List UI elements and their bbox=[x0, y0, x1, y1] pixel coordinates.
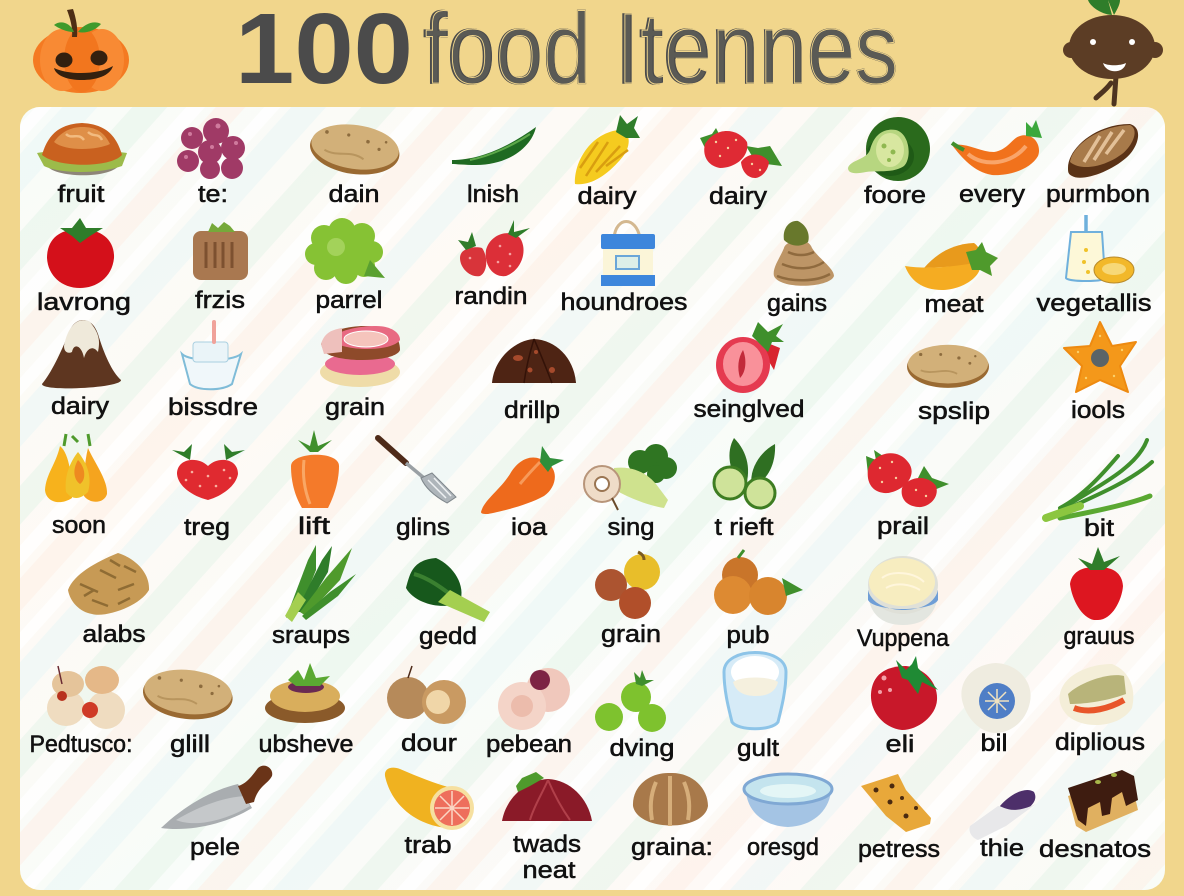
icon: chocolate mountain bbox=[42, 320, 121, 388]
label: ubsheve: ubsheve bbox=[258, 731, 354, 758]
label: parrel: parrel bbox=[316, 287, 382, 314]
label: grain: grain bbox=[601, 621, 661, 648]
label: Pedtusco:: Pedtusco: bbox=[30, 731, 132, 758]
label: ioa: ioa bbox=[511, 514, 548, 541]
label: gedd: gedd bbox=[419, 623, 477, 650]
label: randin: randin bbox=[454, 283, 528, 310]
label: meat: meat bbox=[924, 291, 984, 318]
label: every: every bbox=[959, 181, 1025, 208]
icon: pie bbox=[37, 123, 127, 175]
icon: potato bbox=[907, 345, 989, 388]
icon: round bun bbox=[633, 773, 708, 826]
icon: garlic bbox=[961, 663, 1031, 733]
label: Vuppena: Vuppena bbox=[857, 625, 950, 652]
icon: potato bbox=[307, 119, 403, 180]
icon: orange pepper bbox=[952, 120, 1042, 175]
label: treg: treg bbox=[184, 514, 230, 541]
icon: lettuce bbox=[305, 218, 385, 284]
icon: red meat dome bbox=[502, 772, 592, 821]
label: twads neat bbox=[513, 831, 581, 884]
label: lavrong: lavrong bbox=[37, 289, 131, 316]
icon: chocolate cake bbox=[1068, 770, 1138, 832]
label: dairy: dairy bbox=[51, 393, 109, 420]
label: desnatos: desnatos bbox=[1039, 836, 1151, 863]
label: graina:: graina: bbox=[631, 834, 713, 861]
icon: strawberry half bbox=[716, 322, 784, 393]
icon: pink flower bbox=[498, 668, 570, 730]
label: drillp: drillp bbox=[504, 397, 560, 424]
label: bit: bit bbox=[1084, 515, 1114, 542]
icon: scallion bbox=[1046, 440, 1152, 518]
label: soon: soon bbox=[52, 512, 106, 539]
label: seinglved: seinglved bbox=[694, 396, 804, 423]
label: te:: te: bbox=[198, 181, 228, 208]
label: dairy: dairy bbox=[578, 183, 636, 210]
icon: glass of milk bbox=[724, 652, 786, 729]
label: gains: gains bbox=[767, 290, 827, 317]
label: diplious: diplious bbox=[1055, 729, 1145, 756]
label: lnish: lnish bbox=[467, 181, 519, 208]
label: twads neat: twads bbox=[513, 831, 581, 858]
header icon: chocolate character bbox=[1063, 0, 1163, 104]
icon: grapefruit bbox=[385, 768, 474, 830]
icon: strawberries bbox=[866, 450, 949, 507]
icon: green okra bbox=[452, 127, 536, 165]
icon: onions bbox=[714, 550, 803, 615]
label: petress: petress bbox=[858, 836, 940, 863]
label: glill: glill bbox=[170, 731, 210, 758]
label: foore: foore bbox=[864, 182, 926, 209]
label: dairy: dairy bbox=[709, 183, 767, 210]
icon: filled pastry bbox=[265, 663, 345, 723]
icon: heart strawberry bbox=[172, 444, 245, 500]
icon: yellow carrots bbox=[905, 242, 998, 290]
label: sing: sing bbox=[608, 514, 654, 541]
label: glins: glins bbox=[396, 514, 450, 541]
label: pub: pub bbox=[726, 622, 770, 649]
icon: cucumber slices bbox=[714, 438, 775, 508]
icon: red pepper bbox=[1070, 547, 1123, 620]
icon: green onion bbox=[285, 545, 356, 622]
icon: spatula bbox=[378, 438, 456, 503]
label: t rieft: t rieft bbox=[714, 514, 774, 541]
label: bissdre: bissdre bbox=[168, 394, 258, 421]
icon: broccoli and stems bbox=[584, 444, 677, 510]
icon: purple eggplant bbox=[969, 790, 1036, 840]
icon: pile of grains bbox=[68, 553, 149, 615]
icon: brown box bbox=[193, 222, 248, 280]
label: sraups: sraups bbox=[272, 622, 350, 649]
icon: kitchen knife bbox=[161, 766, 272, 829]
label: twads neat: neat bbox=[522, 857, 576, 884]
header icon: pumpkin bbox=[33, 9, 129, 93]
icon: strawberries bbox=[458, 220, 530, 276]
icon: bowl of noodles bbox=[868, 556, 938, 625]
title bbox=[235, 0, 898, 105]
icon: green limes bbox=[595, 670, 666, 732]
label: gult: gult bbox=[737, 735, 779, 762]
label: dain: dain bbox=[328, 181, 380, 208]
label: bil: bil bbox=[980, 730, 1008, 757]
label: purmbon: purmbon bbox=[1046, 181, 1150, 208]
label: pebean: pebean bbox=[486, 731, 572, 758]
icon: walnuts bbox=[387, 666, 466, 724]
icon: layered burger bbox=[320, 326, 400, 387]
icon: leafy greens bbox=[406, 558, 490, 622]
label: spslip: spslip bbox=[918, 398, 990, 425]
label: thie: thie bbox=[980, 835, 1024, 862]
icon: strawberries bbox=[700, 128, 782, 178]
icon: yellow corn bbox=[575, 115, 640, 184]
label: pele: pele bbox=[190, 834, 240, 861]
icon: milk glass bbox=[1066, 215, 1134, 283]
label: eli: eli bbox=[886, 731, 914, 758]
icon: red tomato bbox=[47, 218, 114, 288]
icon: cucumber bbox=[848, 117, 930, 181]
label: iools: iools bbox=[1071, 397, 1125, 424]
label: dving: dving bbox=[610, 735, 674, 762]
icon: bread loaf bbox=[1068, 124, 1138, 178]
icon: blue box bbox=[601, 222, 655, 286]
label: prail: prail bbox=[877, 513, 929, 540]
icon: blue bowl bbox=[744, 774, 832, 827]
label: alabs: alabs bbox=[82, 621, 146, 648]
icon: orange carrot bbox=[291, 430, 339, 508]
label: fruit: fruit bbox=[58, 181, 105, 208]
label: lift: lift bbox=[298, 513, 330, 540]
icon: sandwich bbox=[1059, 664, 1133, 725]
icon: seafood platter bbox=[47, 666, 125, 729]
label: trab: trab bbox=[404, 832, 452, 859]
icon: potato bbox=[141, 665, 235, 724]
icon: big strawberry bbox=[871, 656, 938, 730]
label: houndroes: houndroes bbox=[560, 289, 688, 316]
label: grauus: grauus bbox=[1064, 623, 1134, 650]
label: frzis: frzis bbox=[195, 287, 245, 314]
icon: yellow pears bbox=[45, 434, 107, 502]
icon: purple grapes bbox=[177, 118, 245, 179]
label: oresgd: oresgd bbox=[747, 834, 819, 861]
icon: toast bbox=[861, 774, 931, 832]
icon: cup of cream bbox=[182, 322, 241, 389]
icon: spiral pastry bbox=[774, 221, 834, 286]
label: grain: grain bbox=[325, 394, 385, 421]
label: dour: dour bbox=[401, 730, 457, 757]
icon: mixed fruits bbox=[595, 552, 660, 619]
icon: chocolate dome bbox=[492, 339, 576, 383]
label: vegetallis: vegetallis bbox=[1036, 290, 1152, 317]
icon: carrot bbox=[481, 446, 564, 514]
icon: orange star bbox=[1064, 322, 1136, 392]
